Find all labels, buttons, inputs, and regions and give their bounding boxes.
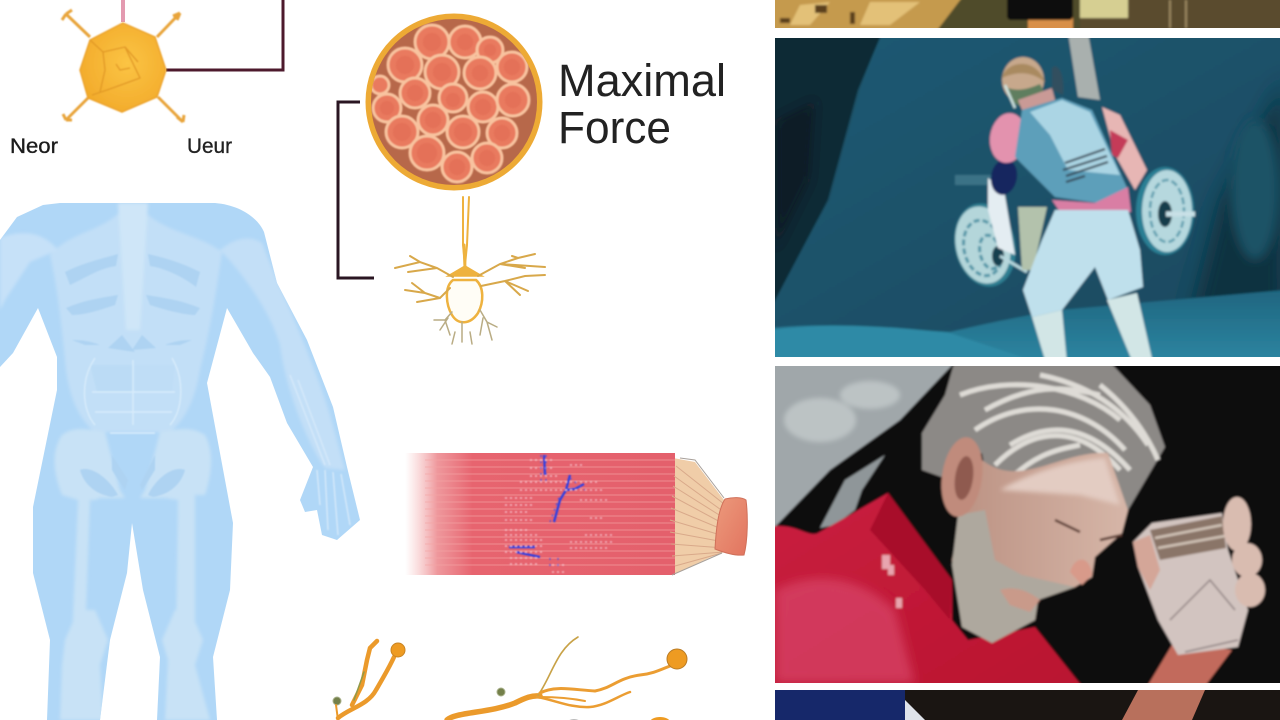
heading: Maximal Force: Force [558, 102, 671, 153]
fibre striations [425, 460, 675, 565]
tendon tip [715, 498, 747, 555]
label: Neor: Neor [10, 135, 58, 158]
rock wall [869, 38, 1280, 297]
waist band [1052, 187, 1131, 212]
muscle bundle cross-section [366, 14, 542, 190]
weight plate right [1136, 167, 1195, 255]
jar [1133, 513, 1248, 655]
shorts [1023, 210, 1143, 317]
nerve branches [333, 637, 687, 720]
hair [922, 360, 1165, 510]
photo: old man with jar [770, 360, 1280, 690]
vest [1015, 98, 1128, 203]
weight plate left [953, 202, 1029, 288]
right arm and raised arm [1102, 107, 1147, 190]
vest graphic [1063, 149, 1108, 182]
bracket [338, 102, 374, 278]
dark cave [770, 33, 882, 310]
head [1002, 57, 1044, 103]
photo: bottom strip [775, 690, 1280, 720]
red shirt [770, 493, 1085, 690]
heading: Maximal Force [558, 55, 726, 153]
grey cloth [770, 360, 957, 532]
diagram: nerve cell with connecting lines [0, 0, 283, 160]
legs [1032, 310, 1067, 363]
connector lines [0, 0, 283, 160]
neuron [395, 197, 545, 344]
back leg [1018, 207, 1047, 270]
tendon fan [670, 466, 724, 566]
muscle fibres [371, 25, 529, 182]
ear [939, 436, 984, 519]
blue nerve endings [505, 455, 615, 572]
fingers [1223, 497, 1265, 607]
human body figure [0, 203, 360, 720]
left nerve [333, 641, 405, 720]
left arm [988, 178, 1015, 255]
muscle fibre [405, 453, 747, 575]
beard [952, 510, 1075, 643]
eye, brow and nose [1055, 520, 1122, 540]
floor [770, 290, 1280, 363]
photo: top strip [775, 0, 1280, 28]
photo: weightlifter [770, 33, 1280, 363]
icon: golden cell [62, 10, 184, 122]
arm and wrist [1146, 644, 1234, 683]
muscle shading on ribs and abdomen [65, 254, 200, 497]
skeleton overlay [0, 203, 345, 720]
heading: Maximal Force: Maximal [558, 55, 726, 106]
pink shoulder [988, 111, 1022, 165]
right nerve [447, 637, 687, 720]
face [952, 453, 1128, 643]
label: Ueur: Ueur [187, 135, 232, 158]
